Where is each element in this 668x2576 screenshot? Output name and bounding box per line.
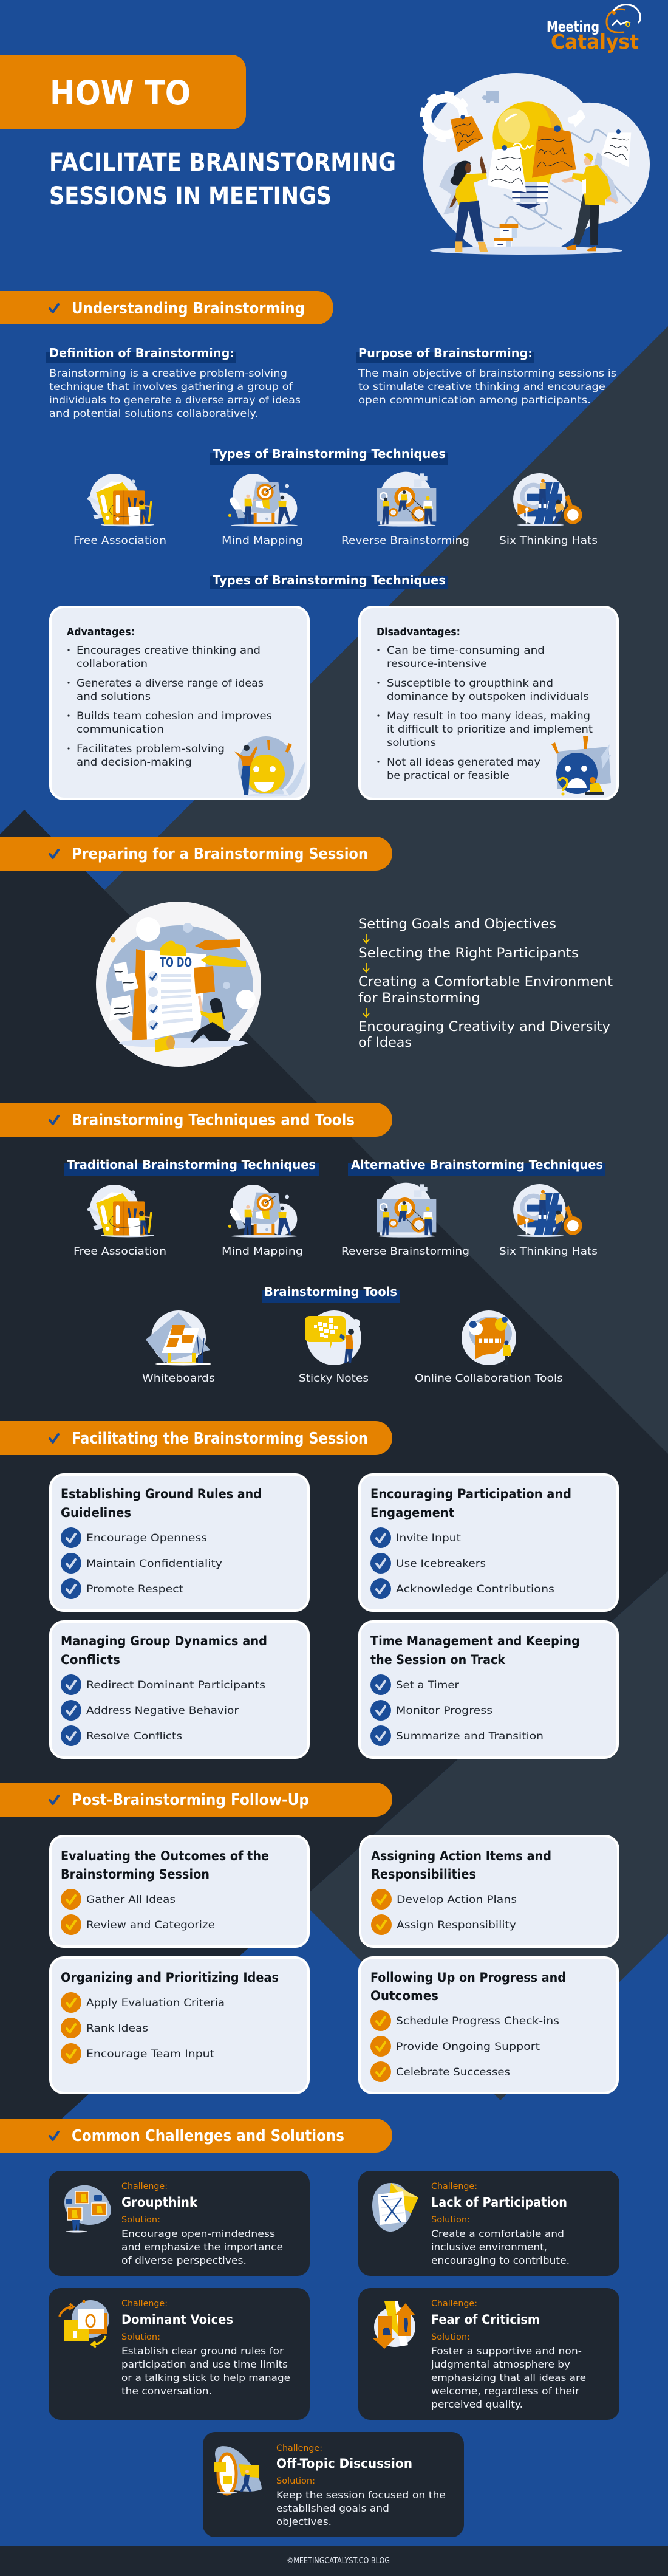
process list: preparation steps: of Ideas bbox=[358, 1035, 412, 1050]
card: groupthink: and emphasize the importance bbox=[121, 2241, 283, 2253]
panel: encouraging participation: Encouraging Participation and bbox=[370, 1487, 571, 1501]
panel: advantages: communication bbox=[77, 724, 164, 736]
panel: following up on progress: Celebrate Successes bbox=[396, 2066, 510, 2078]
panel: time management: Summarize and Transition bbox=[396, 1730, 544, 1742]
logo: Meeting Catalyst: Catalyst bbox=[551, 30, 639, 53]
technique: reverse brainstorming: Reverse Brainstorming bbox=[341, 1245, 469, 1258]
technique: mind mapping bbox=[222, 474, 303, 547]
panel: disadvantages: Susceptible to groupthink and bbox=[387, 677, 553, 690]
icon: crossed-out paper bbox=[372, 2183, 418, 2232]
card: groupthink: Groupthink bbox=[121, 2195, 198, 2210]
panel: evaluating the outcomes: Review and Categorize bbox=[86, 1919, 215, 1931]
panel: disadvantages: Not all ideas generated may bbox=[387, 756, 540, 769]
panel: establishing ground rules: Encourage Openness bbox=[86, 1532, 207, 1544]
panel: disadvantages: resource-intensive bbox=[387, 658, 487, 670]
technique: free association: Free Association bbox=[73, 1245, 166, 1258]
panel: managing group dynamics: Resolve Conflicts bbox=[86, 1730, 182, 1742]
technique: mind mapping: Mind Mapping bbox=[222, 1245, 303, 1258]
figure: man bbox=[561, 153, 618, 251]
technique: six thinking hats bbox=[499, 473, 598, 547]
icon: fear of criticism bbox=[372, 2301, 415, 2349]
section header: Understanding Brainstorming: Understanding Brainstorming bbox=[72, 300, 305, 318]
process list: preparation steps bbox=[358, 917, 613, 1050]
card: dominant voices bbox=[49, 2288, 310, 2420]
section header: Preparing for a Brainstorming Session bbox=[0, 837, 392, 871]
heading: alternative techniques: Alternative Brainstorming Techniques bbox=[351, 1157, 603, 1172]
figure: woman bbox=[449, 156, 488, 252]
text block: definition of brainstorming: Brainstorming is a creative problem-solving bbox=[49, 368, 287, 380]
card: fear of criticism: Challenge: bbox=[431, 2299, 477, 2309]
panel: assigning action items: Responsibilities bbox=[371, 1867, 476, 1882]
panel: managing group dynamics: Conflicts bbox=[61, 1653, 120, 1667]
panel: time management: the Session on Track bbox=[370, 1653, 506, 1667]
panel: advantages: Generates a diverse range of ideas bbox=[77, 677, 264, 690]
panel: time management: Monitor Progress bbox=[396, 1705, 492, 1717]
panel: assigning action items: Assign Responsibility bbox=[397, 1919, 516, 1931]
card: groupthink: Challenge: bbox=[121, 2182, 168, 2191]
panel: advantages: Encourages creative thinking and bbox=[77, 645, 261, 657]
technique: six thinking hats: Six Thinking Hats bbox=[499, 535, 598, 547]
section header: Post-Brainstorming Follow-Up bbox=[0, 1783, 392, 1817]
process list: preparation steps: Setting Goals and Objectives bbox=[358, 917, 556, 932]
illustration: to-do list bbox=[96, 902, 261, 1067]
text block: definition of brainstorming: and potential solutions collaboratively. bbox=[49, 408, 258, 420]
card: fear of criticism bbox=[358, 2288, 619, 2420]
panel: disadvantages: Can be time-consuming and bbox=[387, 645, 545, 657]
section header: Understanding Brainstorming bbox=[0, 291, 333, 324]
card: fear of criticism: Solution: bbox=[431, 2332, 470, 2342]
card: dominant voices: or a talking stick to help manage bbox=[121, 2372, 290, 2383]
card: off-topic discussion: Off-Topic Discussion bbox=[276, 2456, 412, 2471]
panel: organizing and prioritizing ideas: Rank Ideas bbox=[86, 2023, 148, 2035]
card: off-topic discussion: Keep the session focused on the bbox=[276, 2489, 446, 2501]
tool: online collaboration tools bbox=[415, 1310, 563, 1385]
panel: establishing ground rules: Maintain Confidentiality bbox=[86, 1558, 222, 1570]
panel: advantages: and decision-making bbox=[77, 756, 192, 769]
section header: Brainstorming Techniques and Tools: Brainstorming Techniques and Tools bbox=[72, 1111, 355, 1129]
section header: Brainstorming Techniques and Tools bbox=[0, 1103, 392, 1137]
panel: evaluating the outcomes bbox=[50, 1836, 308, 1947]
section header: Preparing for a Brainstorming Session: Preparing for a Brainstorming Session bbox=[72, 845, 368, 863]
panel: encouraging participation: Engagement bbox=[370, 1506, 454, 1520]
technique: free association bbox=[73, 1185, 166, 1258]
technique: reverse brainstorming: Reverse Brainstorming bbox=[341, 535, 469, 547]
footer bbox=[0, 2546, 668, 2576]
panel: following up on progress bbox=[360, 1958, 618, 2093]
hero illustration: team around lightbulb bbox=[423, 73, 650, 255]
panel: advantages: Facilitates problem-solving bbox=[77, 743, 225, 755]
panel: managing group dynamics: Address Negative Behavior bbox=[86, 1705, 239, 1717]
tool: whiteboards bbox=[142, 1310, 215, 1385]
card: dominant voices: Establish clear ground rules for bbox=[121, 2345, 284, 2357]
technique: six thinking hats bbox=[499, 1184, 598, 1258]
tool: whiteboards: Whiteboards bbox=[142, 1372, 215, 1385]
card: lack of participation: Create a comfortable and bbox=[431, 2228, 564, 2239]
card: dominant voices: Solution: bbox=[121, 2332, 160, 2342]
panel: advantages bbox=[50, 607, 308, 799]
card: fear of criticism: Fear of Criticism bbox=[431, 2312, 540, 2327]
panel: establishing ground rules bbox=[50, 1475, 308, 1611]
logo: Meeting Catalyst: Meeting bbox=[547, 18, 599, 35]
section header: Common Challenges and Solutions: Common Challenges and Solutions bbox=[72, 2127, 344, 2145]
card: dominant voices: the conversation. bbox=[121, 2385, 212, 2397]
panel: following up on progress: Following Up on Progress and bbox=[370, 1970, 566, 1985]
panel: assigning action items bbox=[360, 1836, 618, 1947]
text block: purpose of brainstorming bbox=[356, 346, 616, 406]
icon: smiley with woman bbox=[234, 736, 305, 797]
panel: disadvantages: Disadvantages: bbox=[377, 626, 460, 639]
tool: sticky notes: Sticky Notes bbox=[299, 1372, 369, 1385]
card: fear of criticism: Foster a supportive and non- bbox=[431, 2345, 582, 2357]
card: lack of participation: Challenge: bbox=[431, 2182, 477, 2191]
card: dominant voices: Dominant Voices bbox=[121, 2312, 233, 2327]
panel: managing group dynamics: Managing Group Dynamics and bbox=[61, 1634, 267, 1648]
panel: advantages: collaboration bbox=[77, 658, 148, 670]
technique: six thinking hats: Six Thinking Hats bbox=[499, 1245, 598, 1258]
panel: establishing ground rules: Establishing Ground Rules and bbox=[61, 1487, 262, 1501]
text block: purpose of brainstorming: The main objective of brainstorming sessions is bbox=[358, 368, 616, 380]
technique: mind mapping: Mind Mapping bbox=[222, 535, 303, 547]
card: lack of participation: inclusive environment, bbox=[431, 2241, 547, 2253]
icon: groupthink bbox=[64, 2185, 111, 2232]
panel: advantages: and solutions bbox=[77, 691, 151, 703]
card: dominant voices: Challenge: bbox=[121, 2299, 168, 2309]
section header: Facilitating the Brainstorming Session bbox=[0, 1421, 392, 1455]
panel: time management: Time Management and Keeping bbox=[370, 1634, 580, 1648]
panel: evaluating the outcomes: Brainstorming Session bbox=[61, 1867, 210, 1882]
card: off-topic discussion: established goals and bbox=[276, 2502, 389, 2514]
process list: preparation steps: for Brainstorming bbox=[358, 991, 480, 1006]
heading: traditional techniques: Traditional Brainstorming Techniques bbox=[67, 1157, 316, 1172]
panel: time management: Set a Timer bbox=[396, 1679, 459, 1691]
technique: reverse brainstorming bbox=[341, 1183, 469, 1258]
technique: mind mapping bbox=[222, 1185, 303, 1258]
panel: organizing and prioritizing ideas: Encourage Team Input bbox=[86, 2048, 214, 2060]
text block: definition of brainstorming bbox=[46, 346, 301, 420]
technique: free association bbox=[73, 474, 166, 547]
logo: Meeting Catalyst bbox=[547, 5, 640, 53]
heading: types of brainstorming techniques (second): Types of Brainstorming Techniques bbox=[213, 573, 446, 587]
card: lack of participation: Lack of Participation bbox=[431, 2195, 567, 2210]
title banner: HOW TO: HOW TO bbox=[50, 74, 191, 112]
panel: disadvantages: it difficult to prioritize and implement bbox=[387, 724, 593, 736]
text block: definition of brainstorming: technique that involves gathering a group of bbox=[49, 381, 293, 393]
card: groupthink: Encourage open-mindedness bbox=[121, 2228, 275, 2239]
text block: purpose of brainstorming: to stimulate creative thinking and encourage bbox=[358, 381, 605, 393]
card: groupthink bbox=[49, 2171, 310, 2276]
card: groupthink: Solution: bbox=[121, 2215, 160, 2225]
card: off-topic discussion bbox=[203, 2432, 464, 2537]
card: fear of criticism: emphasizing that all ideas are bbox=[431, 2372, 586, 2383]
panel: advantages: Builds team cohesion and improves bbox=[77, 710, 272, 722]
icon: worried face with person bbox=[551, 736, 611, 796]
panel: advantages: Advantages: bbox=[67, 626, 135, 639]
technique: free association: Free Association bbox=[73, 535, 166, 547]
panel: organizing and prioritizing ideas: Organizing and Prioritizing Ideas bbox=[61, 1970, 279, 1985]
text block: definition of brainstorming: individuals to generate a diverse array of ideas bbox=[49, 394, 301, 406]
text block: definition of brainstorming: Definition of Brainstorming: bbox=[49, 346, 234, 360]
panel: time management bbox=[360, 1622, 618, 1758]
tool: online collaboration tools: Online Collaboration Tools bbox=[415, 1372, 563, 1385]
card: off-topic discussion: objectives. bbox=[276, 2516, 332, 2527]
card: lack of participation bbox=[358, 2171, 619, 2276]
main title bbox=[49, 149, 396, 210]
card: dominant voices: participation and use time limits bbox=[121, 2358, 288, 2370]
panel: establishing ground rules: Guidelines bbox=[61, 1506, 131, 1520]
arrow bbox=[363, 1008, 369, 1017]
section header: Common Challenges and Solutions bbox=[0, 2119, 392, 2153]
panel: disadvantages bbox=[360, 607, 618, 799]
panel: following up on progress: Outcomes bbox=[370, 1989, 438, 2003]
panel: encouraging participation: Acknowledge Contributions bbox=[396, 1583, 554, 1595]
card: fear of criticism: welcome, regardless of their bbox=[431, 2385, 579, 2397]
panel: disadvantages: May result in too many ideas, making bbox=[387, 710, 590, 722]
process list: preparation steps: Creating a Comfortable Environment bbox=[358, 975, 613, 990]
panel: assigning action items: Assigning Action Items and bbox=[371, 1849, 551, 1863]
tool: sticky notes bbox=[299, 1310, 369, 1385]
panel: evaluating the outcomes: Evaluating the Outcomes of the bbox=[61, 1849, 269, 1863]
panel: disadvantages: dominance by outspoken individuals bbox=[387, 691, 589, 703]
panel: following up on progress: Provide Ongoing Support bbox=[396, 2041, 540, 2053]
panel: assigning action items: Develop Action Plans bbox=[397, 1894, 517, 1906]
panel: managing group dynamics bbox=[50, 1622, 308, 1758]
card: off-topic discussion: Solution: bbox=[276, 2476, 315, 2486]
panel: encouraging participation bbox=[360, 1475, 618, 1611]
process list: preparation steps: Selecting the Right Participants bbox=[358, 946, 579, 961]
heading: brainstorming tools: Brainstorming Tools bbox=[264, 1284, 397, 1299]
panel: managing group dynamics: Redirect Dominant Participants bbox=[86, 1679, 265, 1691]
footer: ©MEETINGCATALYST.CO BLOG bbox=[287, 2557, 390, 2566]
panel: disadvantages: solutions bbox=[387, 737, 436, 749]
panel: evaluating the outcomes: Gather All Ideas bbox=[86, 1894, 176, 1906]
heading: types of brainstorming techniques: Types of Brainstorming Techniques bbox=[213, 447, 446, 461]
section header: Facilitating the Brainstorming Session: Facilitating the Brainstorming Session bbox=[72, 1430, 368, 1448]
title banner: HOW TO bbox=[0, 55, 246, 129]
main title: FACILITATE BRAINSTORMING bbox=[49, 149, 396, 177]
icon: dominant voices bbox=[60, 2300, 109, 2347]
panel: establishing ground rules: Promote Respect bbox=[86, 1583, 183, 1595]
icon: clock and envelopes bbox=[214, 2446, 262, 2494]
card: groupthink: of diverse perspectives. bbox=[121, 2255, 247, 2266]
panel: organizing and prioritizing ideas bbox=[50, 1958, 308, 2093]
arrow bbox=[363, 934, 369, 943]
panel: organizing and prioritizing ideas: Apply Evaluation Criteria bbox=[86, 1997, 225, 2009]
process list: preparation steps: Encouraging Creativity and Diversity bbox=[358, 1019, 610, 1035]
main title: SESSIONS IN MEETINGS bbox=[49, 182, 332, 210]
card: fear of criticism: judgmental atmosphere by bbox=[431, 2358, 570, 2370]
text block: purpose of brainstorming: open communication among participants. bbox=[358, 394, 591, 406]
card: lack of participation: encouraging to contribute. bbox=[431, 2255, 570, 2266]
card: fear of criticism: perceived quality. bbox=[431, 2399, 523, 2410]
technique: reverse brainstorming bbox=[341, 472, 469, 547]
arrow bbox=[363, 963, 369, 972]
text block: purpose of brainstorming: Purpose of Brainstorming: bbox=[358, 346, 533, 360]
panel: encouraging participation: Use Icebreakers bbox=[396, 1558, 486, 1570]
illustration: to-do list: TO DO bbox=[160, 955, 192, 970]
panel: following up on progress: Schedule Progress Check-ins bbox=[396, 2015, 559, 2027]
section header: Post-Brainstorming Follow-Up: Post-Brainstorming Follow-Up bbox=[72, 1791, 309, 1809]
card: off-topic discussion: Challenge: bbox=[276, 2444, 322, 2453]
panel: disadvantages: be practical or feasible bbox=[387, 770, 510, 782]
panel: encouraging participation: Invite Input bbox=[396, 1532, 461, 1544]
card: lack of participation: Solution: bbox=[431, 2215, 470, 2225]
